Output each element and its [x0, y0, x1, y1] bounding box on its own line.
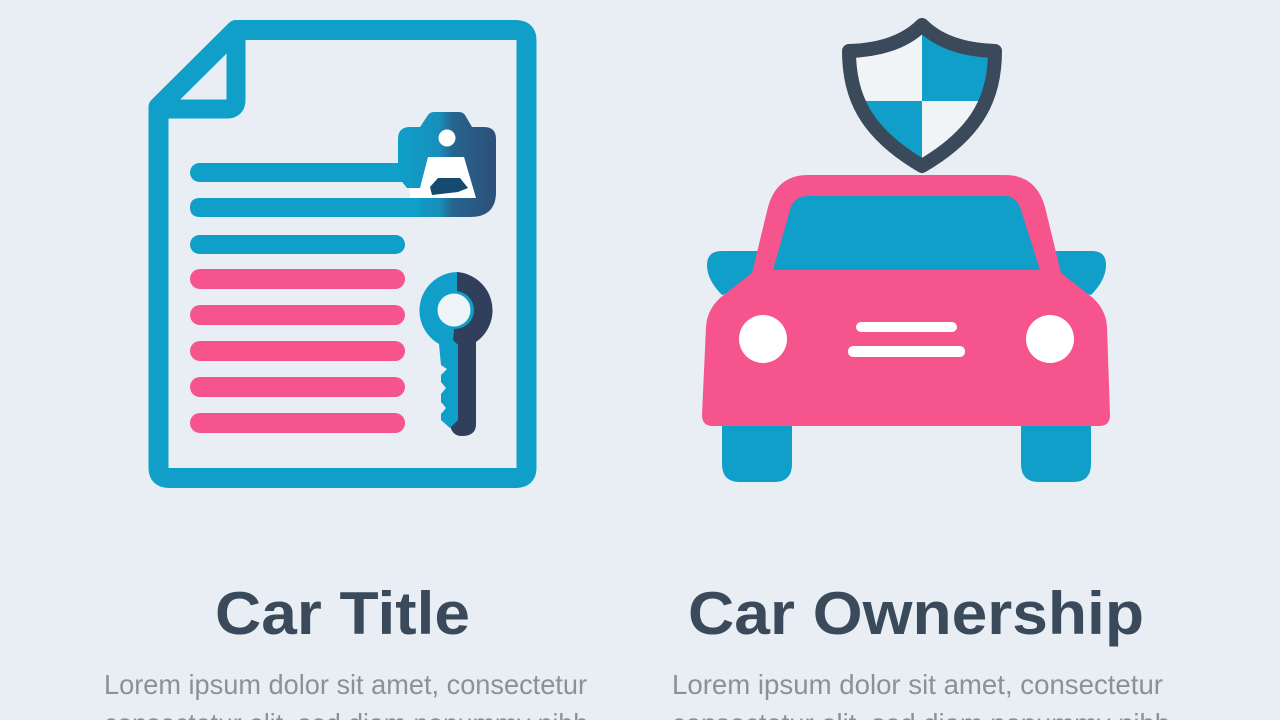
heading: car title: Car Title — [215, 580, 470, 647]
panel: car ownership — [672, 20, 1170, 720]
document outline — [158, 30, 526, 478]
document corner fold — [160, 32, 236, 109]
pink text lines — [190, 269, 405, 433]
body text: car title — [104, 669, 588, 720]
car grille — [848, 322, 965, 357]
car wheels — [722, 415, 1091, 482]
icon: car — [702, 175, 1110, 482]
icon: camera badge — [190, 112, 496, 217]
body text: car ownership: Lorem ipsum dolor sit amet, consectetur — [672, 669, 1163, 700]
panel: car title — [104, 30, 588, 720]
car headlights — [739, 315, 1074, 363]
icon: title document — [158, 30, 526, 478]
heading: car ownership: Car Ownership — [688, 580, 1144, 647]
car windshield — [773, 196, 1040, 270]
body text: car ownership — [672, 669, 1170, 720]
car body — [702, 175, 1110, 426]
body text: car title: Lorem ipsum dolor sit amet, consectetur — [104, 669, 587, 700]
icon: shield — [840, 20, 1005, 175]
key navy half — [450, 272, 493, 436]
car mirrors — [707, 251, 1106, 295]
icon: key — [419, 272, 493, 436]
blue text lines — [190, 163, 415, 254]
key teal half — [419, 272, 458, 428]
